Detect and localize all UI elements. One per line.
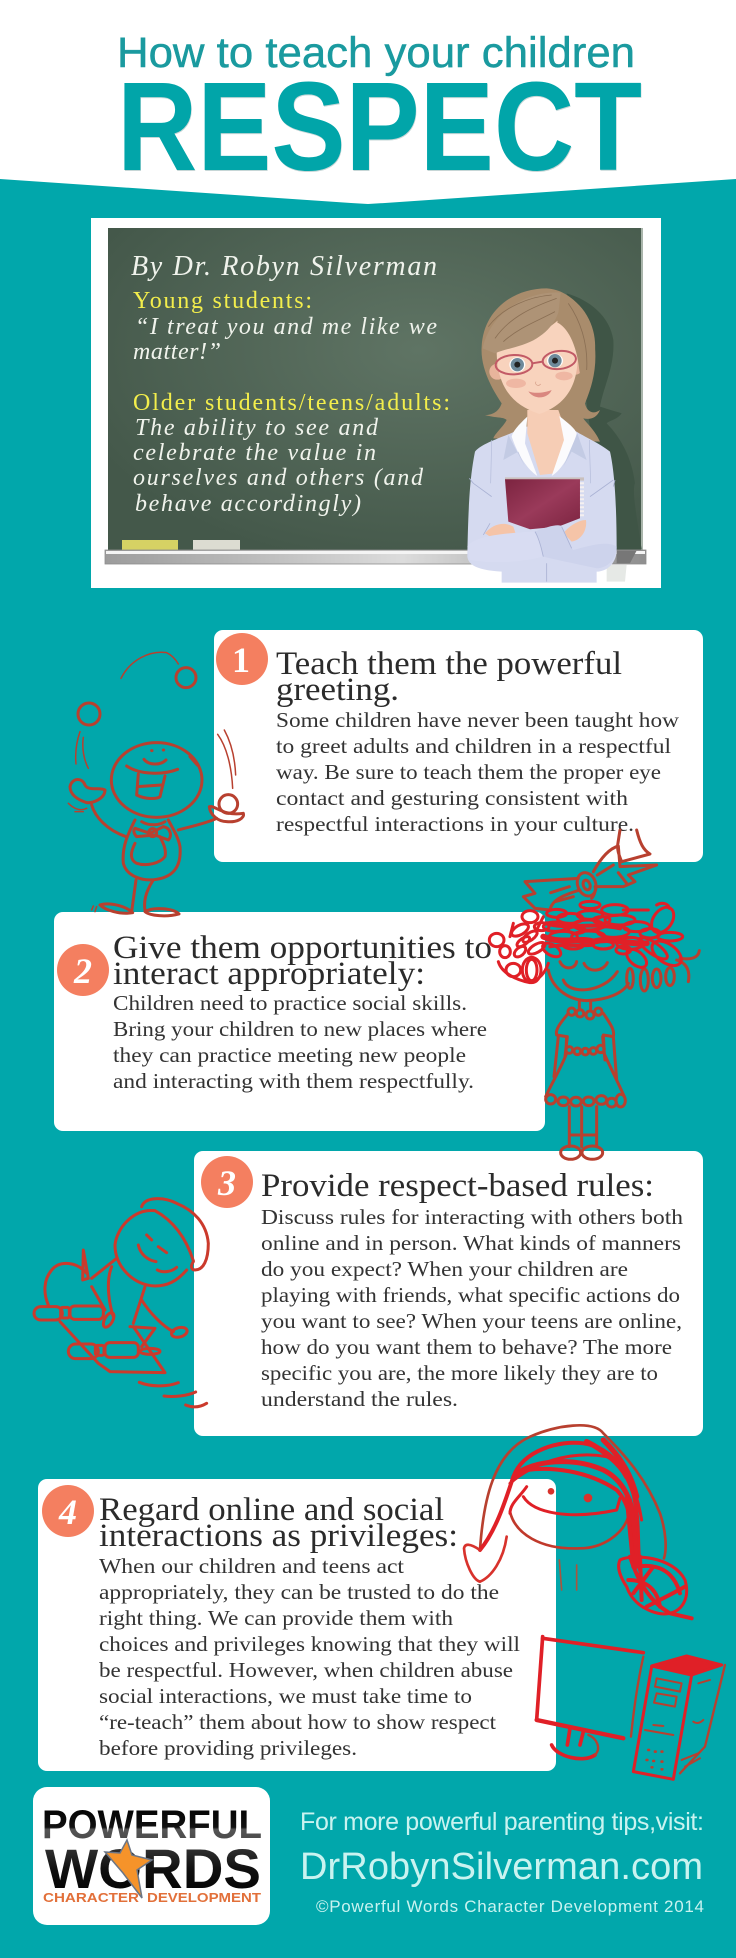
body text 4: appropriately, they can be trusted to do the bbox=[99, 1580, 499, 1604]
heading 1: greeting. bbox=[276, 672, 399, 708]
older students text: behave accordingly) bbox=[135, 491, 361, 517]
body text 1: contact and gesturing consistent with bbox=[276, 786, 629, 810]
young students text bbox=[133, 288, 437, 365]
number badge 1 bbox=[216, 633, 268, 685]
number badge 1: 1 bbox=[232, 640, 250, 680]
body text 3: you want to see? When your teens are online, bbox=[261, 1309, 682, 1333]
body text 1 bbox=[276, 708, 680, 836]
body text 3: do you expect? When your children are bbox=[261, 1257, 628, 1281]
title bbox=[117, 29, 642, 198]
body text 3: specific you are, the more likely they are to bbox=[261, 1361, 658, 1385]
logo tagline: DEVELOPMENT bbox=[147, 1890, 261, 1905]
body text 1: way. Be sure to teach them the proper eye bbox=[276, 760, 661, 784]
footer text bbox=[300, 1808, 704, 1916]
young students text: matter!” bbox=[133, 339, 221, 365]
heading 3: Provide respect-based rules: bbox=[261, 1168, 654, 1204]
body text 2: they can practice meeting new people bbox=[113, 1043, 466, 1067]
body text 3: online and in person. What kinds of manners bbox=[261, 1231, 681, 1255]
subtitle line: How to teach your children bbox=[117, 29, 635, 77]
number badge 2: 2 bbox=[73, 951, 92, 991]
chalkboard surface bbox=[108, 228, 643, 550]
body text 4 bbox=[99, 1554, 520, 1760]
heading 4: Regard online and social bbox=[99, 1492, 444, 1528]
body text 3: Discuss rules for interacting with others both bbox=[261, 1205, 684, 1229]
white header chevron bbox=[0, 0, 736, 204]
body text 4: choices and privileges knowing that they will bbox=[99, 1632, 520, 1656]
older students text: Older students/teens/adults: bbox=[133, 390, 450, 416]
number badge 2 bbox=[57, 944, 109, 996]
body text 4: “re-teach” them about how to show respect bbox=[99, 1710, 496, 1734]
logo tagline: CHARACTER bbox=[43, 1890, 140, 1905]
logo: Powerful Words Character Development bbox=[33, 1787, 270, 1925]
panel: chalkboard bbox=[91, 218, 661, 588]
young students text: “I treat you and me like we bbox=[135, 314, 437, 340]
panel: step 2 bbox=[54, 912, 545, 1131]
body text 4: right thing. We can provide them with bbox=[99, 1606, 454, 1630]
call to action: For more powerful parenting tips,visit: bbox=[300, 1808, 704, 1836]
number badge 3 bbox=[201, 1156, 253, 1208]
heading 1: Teach them the powerful bbox=[276, 646, 622, 682]
body text 2 bbox=[113, 991, 487, 1093]
main title word: RESPECT bbox=[117, 56, 642, 197]
website address: DrRobynSilverman.com bbox=[300, 1846, 703, 1888]
chalk pieces bbox=[122, 540, 240, 550]
young students text: Young students: bbox=[133, 288, 312, 314]
body text 4: social interactions, we must take time to bbox=[99, 1684, 472, 1708]
main title word: RESPECT bbox=[118, 57, 642, 198]
chalk tray bbox=[105, 550, 646, 564]
heading 1 bbox=[276, 646, 622, 708]
older students text bbox=[133, 390, 450, 517]
doodle: girl with long hair bbox=[464, 1425, 725, 1779]
body text 1: Some children have never been taught how bbox=[276, 708, 680, 732]
heading 2: Give them opportunities to bbox=[113, 930, 492, 966]
icon: orange star bbox=[105, 1840, 152, 1898]
body text 3: playing with friends, what specific actions do bbox=[261, 1283, 680, 1307]
number badge 4 bbox=[42, 1485, 94, 1537]
body text 3: understand the rules. bbox=[261, 1387, 458, 1411]
panel: step 3 bbox=[194, 1151, 703, 1436]
teacher illustration bbox=[467, 288, 642, 583]
heading 4: interactions as privileges: bbox=[99, 1518, 458, 1554]
body text 3: how do you want them to behave? The more bbox=[261, 1335, 672, 1359]
number badge 4: 4 bbox=[58, 1492, 77, 1532]
older students text: ourselves and others (and bbox=[133, 465, 424, 491]
body text 2: and interacting with them respectfully. bbox=[113, 1069, 474, 1093]
body text 4: before providing privileges. bbox=[99, 1736, 357, 1760]
doodle: girl with curly hair and bow bbox=[489, 830, 699, 1159]
older students text: The ability to see and bbox=[135, 415, 379, 441]
heading 2: interact appropriately: bbox=[113, 956, 425, 992]
body text 4: When our children and teens act bbox=[99, 1554, 404, 1578]
body text 4: be respectful. However, when children abuse bbox=[99, 1658, 513, 1682]
body text 3 bbox=[261, 1205, 684, 1411]
number badge 3: 3 bbox=[217, 1163, 236, 1203]
logo word: words: WORDS bbox=[45, 1837, 261, 1900]
panel: step 1 bbox=[214, 630, 703, 862]
body text 1: to greet adults and children in a respectful bbox=[276, 734, 671, 758]
heading 4 bbox=[99, 1492, 458, 1554]
logo tagline bbox=[43, 1890, 261, 1905]
doodle: skateboarding child bbox=[34, 1199, 208, 1407]
logo word: powerful: POWERFUL bbox=[42, 1803, 262, 1847]
copyright: ©Powerful Words Character Development 2014 bbox=[316, 1897, 704, 1916]
body text 1: respectful interactions in your culture. bbox=[276, 812, 634, 836]
body text 2: Bring your children to new places where bbox=[113, 1017, 487, 1041]
body text 2: Children need to practice social skills. bbox=[113, 991, 467, 1015]
older students text: celebrate the value in bbox=[133, 440, 376, 466]
doodle: juggling boy bbox=[68, 652, 244, 916]
byline: By Dr. Robyn Silverman bbox=[131, 251, 437, 282]
heading 2 bbox=[113, 930, 492, 992]
panel: step 4 bbox=[38, 1479, 556, 1771]
